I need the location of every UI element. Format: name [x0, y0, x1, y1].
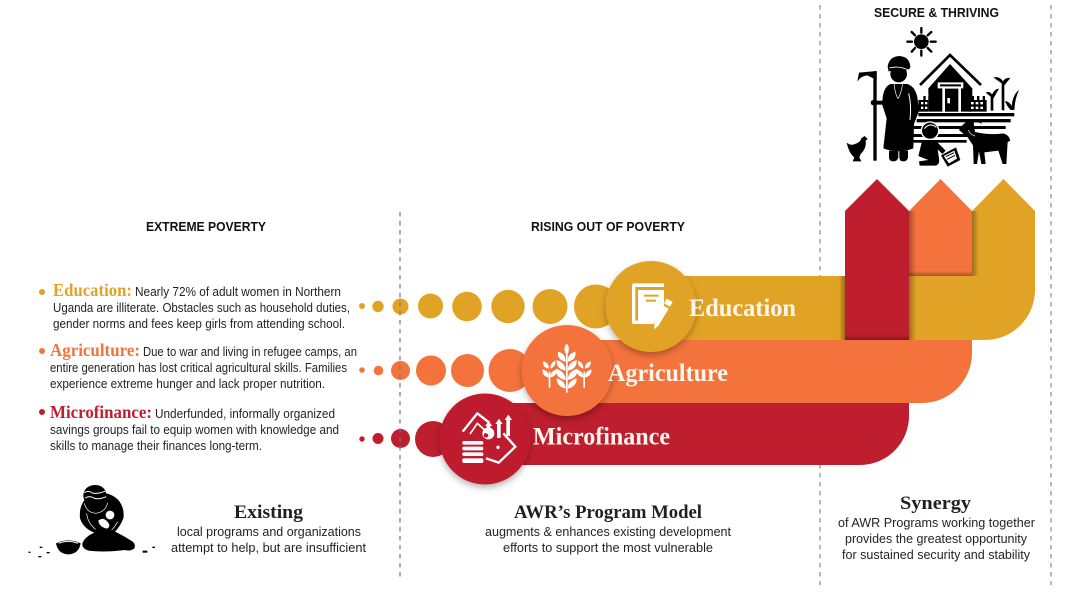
icon: microfinance coins and money — [462, 413, 515, 463]
icon: seated mother with child and bowl — [28, 485, 155, 557]
text block: agriculture description: experience extreme hunger and lack proper nutrition. — [50, 377, 325, 391]
icon: farmer family with house and animals — [847, 28, 1019, 167]
text block: education description: Education: — [53, 280, 132, 300]
chart: microfinance dots — [359, 421, 451, 457]
text block: existing: attempt to help, but are insufficient — [171, 540, 366, 555]
label: microfinance: Microfinance — [533, 424, 670, 450]
text block: AWR's program model: efforts to support the most vulnerable — [503, 540, 713, 555]
text block: microfinance description: skills to manage their finances long-term. — [50, 439, 262, 453]
text block: education description: Nearly 72% of adult women in Northern — [135, 285, 341, 299]
text block: microfinance description: savings groups fail to equip women with knowledge and — [50, 423, 339, 437]
text block: synergy: provides the greatest opportunity — [845, 531, 1027, 546]
icon: wheat — [543, 343, 591, 393]
text block: AWR's program model: AWR’s Program Model — [514, 502, 702, 523]
chart: orange agriculture pathway bar — [567, 340, 972, 403]
chart: red microfinance pathway bar — [485, 403, 909, 465]
text block: microfinance description: Underfunded, informally organized — [155, 407, 335, 421]
text block: microfinance description — [39, 402, 339, 453]
heading: extreme poverty: EXTREME POVERTY — [146, 219, 266, 234]
text block: AWR's program model: augments & enhances existing development — [485, 524, 731, 539]
chart: yellow education pathway bar — [650, 179, 1035, 340]
chart: red microfinance column — [845, 179, 909, 340]
text block: AWR's program model — [485, 502, 731, 555]
text block: existing — [171, 502, 366, 555]
text block: synergy: Synergy — [900, 493, 972, 514]
text block: synergy: of AWR Programs working together — [838, 515, 1036, 530]
text block: education description — [39, 280, 350, 331]
label: agriculture: Agriculture — [608, 360, 728, 387]
text block: agriculture description: Agriculture: — [50, 340, 140, 360]
text block: education description: gender norms and fees keep girls from attending school. — [53, 317, 345, 331]
circle: agriculture — [522, 325, 612, 416]
chart: education dots — [359, 284, 618, 328]
heading: rising out of poverty: RISING OUT OF POVERTY — [531, 219, 685, 234]
circle: education — [606, 261, 696, 352]
chart: orange agriculture column — [909, 179, 972, 276]
text block: microfinance description: Microfinance: — [50, 402, 152, 422]
label: education: Education — [689, 295, 796, 322]
text block: agriculture description: entire generation has lost critical agricultural skills. Families — [50, 361, 347, 375]
heading: secure and thriving: SECURE & THRIVING — [874, 5, 999, 20]
text block: existing: Existing — [234, 502, 304, 523]
icon: book and pencil — [632, 283, 673, 329]
text block: existing: local programs and organizations — [177, 524, 361, 539]
text block: agriculture description: Due to war and living in refugee camps, an — [143, 345, 357, 359]
chart: agriculture dots — [359, 349, 532, 392]
text block: agriculture description — [39, 340, 357, 391]
text block: synergy — [838, 493, 1036, 562]
circle: microfinance — [440, 394, 530, 484]
text block: education description: Uganda are illiterate. Obstacles such as household duties, — [53, 301, 350, 315]
text block: synergy: for sustained security and stability — [842, 547, 1030, 562]
